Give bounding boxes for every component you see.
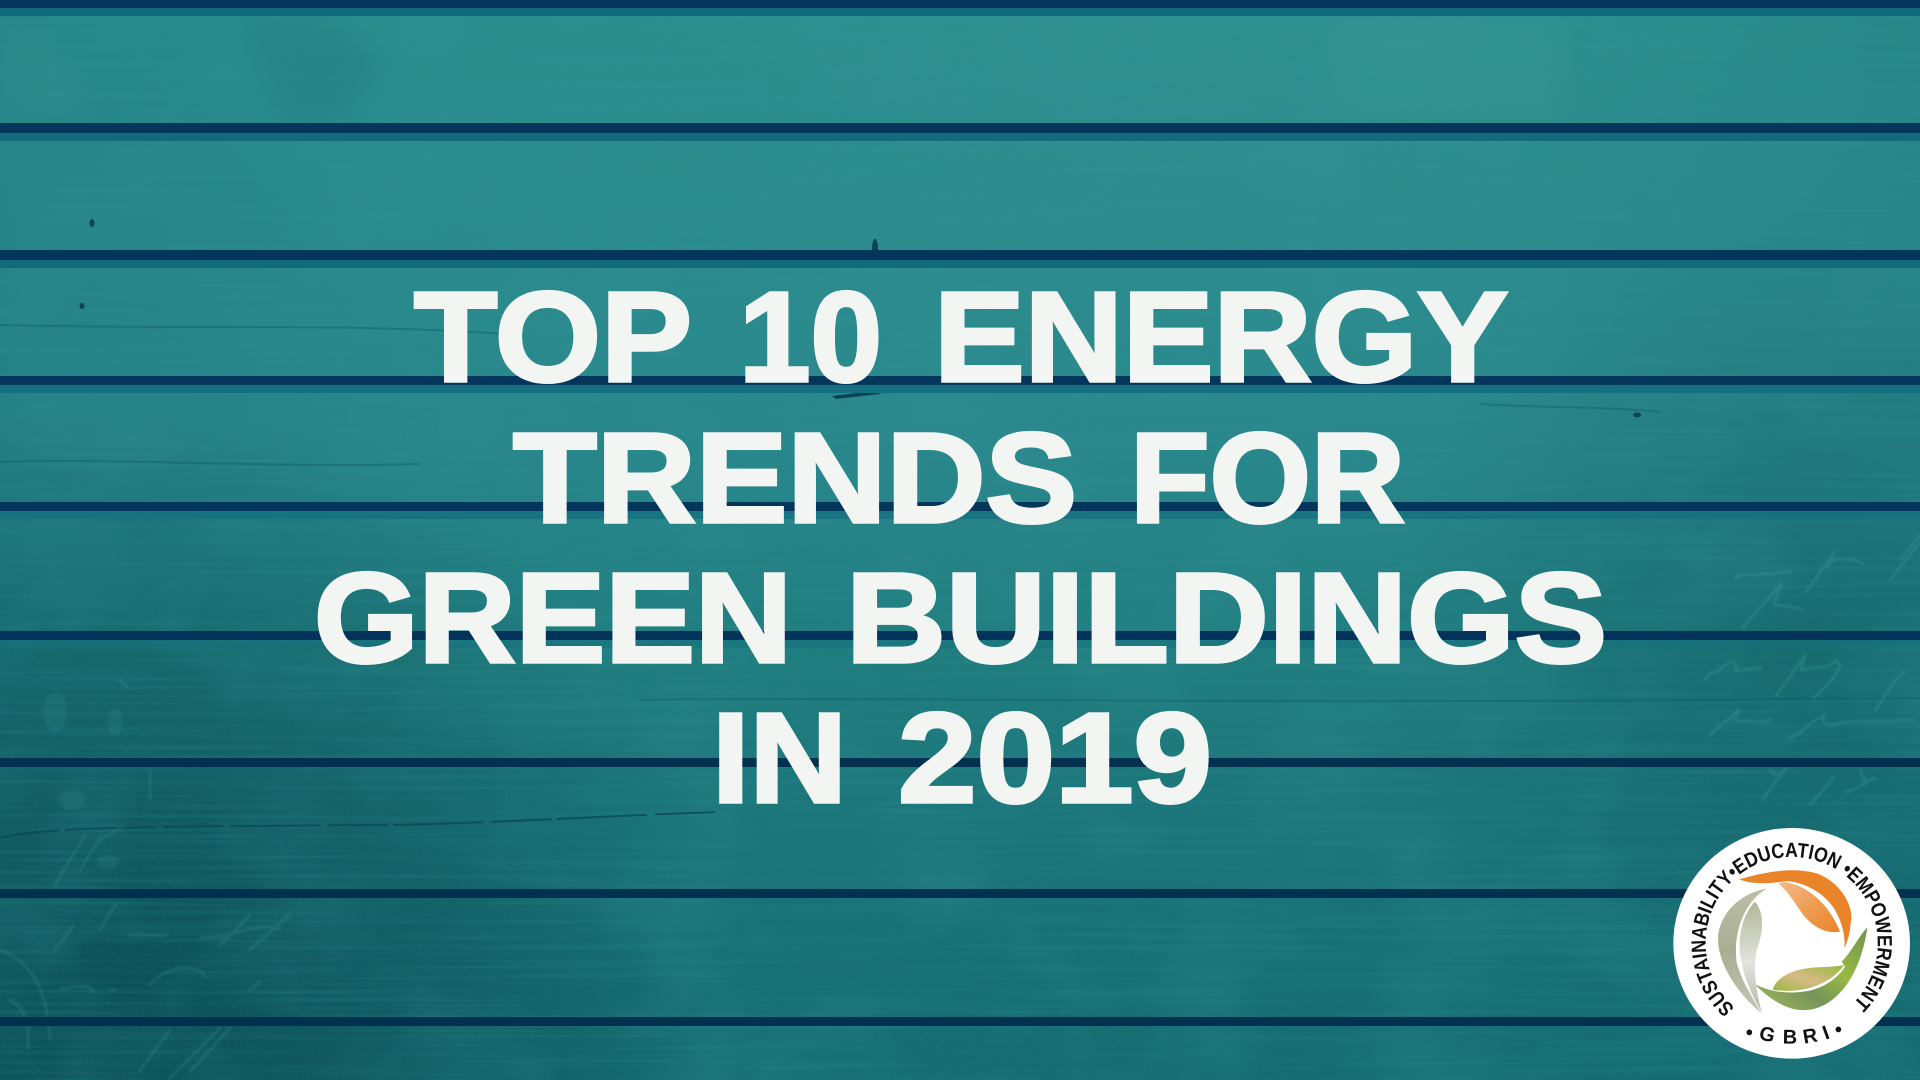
icon: green leaf [1755, 927, 1867, 1010]
title: TOP [414, 266, 692, 409]
badge motto ring text: SUSTAINABILITY•EDUCATION •EMPOWERMENT [1691, 842, 1892, 1016]
title: TRENDS [513, 407, 1077, 550]
badge GBRI text: B [1783, 1027, 1797, 1049]
title: FOR [1130, 407, 1405, 550]
badge GBRI text: G [1757, 1022, 1777, 1048]
GBRI logo badge [1673, 828, 1910, 1059]
badge GBRI text: I [1820, 1022, 1832, 1045]
badge GBRI text: R [1801, 1024, 1820, 1049]
badge GBRI text: • [1831, 1018, 1846, 1041]
title [314, 266, 1607, 830]
badge GBRI text [1741, 1018, 1846, 1049]
icon: orange leaf [1739, 870, 1851, 948]
badge circle [1673, 828, 1910, 1059]
title: BUILDINGS [846, 547, 1607, 690]
title: 2019 [898, 687, 1212, 830]
badge GBRI text: • [1741, 1021, 1757, 1044]
title: 10 [739, 266, 882, 409]
icon: grey leaf [1718, 888, 1767, 1013]
title: IN [712, 687, 847, 830]
title: ENERGY [934, 266, 1508, 409]
title: GREEN [314, 547, 792, 690]
